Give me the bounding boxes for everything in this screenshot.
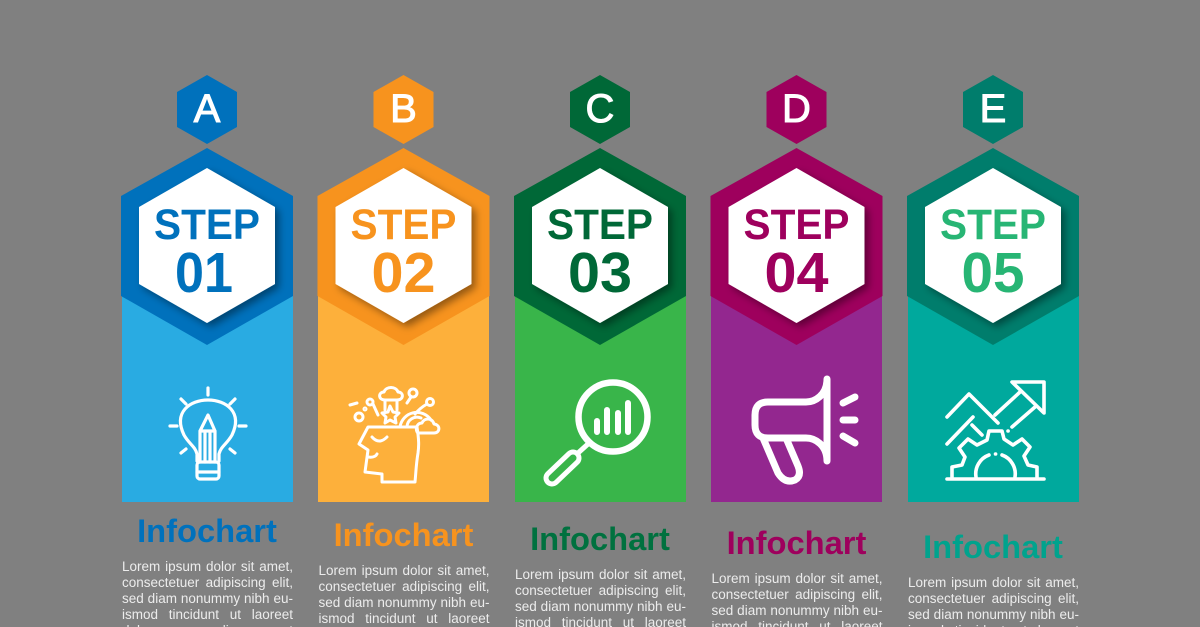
panel: step 05 colour block [908,290,1079,502]
inner hexagon with step label: 01 [175,241,233,305]
badge: letter C: C [586,87,614,131]
inner hexagon with step label: 02 [372,241,436,305]
column 5 graphic [907,75,1079,502]
text block: column 1: Lorem ipsum dolor sit amet, [122,559,293,574]
text block: column 5: Lorem ipsum dolor sit amet, [908,575,1079,590]
icon: gear with rising arrow [947,382,1044,479]
text block: column 3: consectetuer adipiscing elit, [515,583,686,598]
heading: column 3: Infochart [530,520,670,557]
inner hexagon with step label [728,168,864,323]
inner hexagon with step label: 05 [962,241,1024,305]
text block: column 5: sed diam nonummy nibh eu- [908,607,1079,622]
inner hexagon with step label: 03 [568,241,632,305]
inner hexagon with step label [336,168,472,323]
inner hexagon with step label: STEP [940,201,1046,249]
inner hexagon with step label [139,168,275,323]
text block: column 3: Lorem ipsum dolor sit amet, [515,567,686,582]
badge: letter A [177,75,237,144]
text block: column 4 [712,571,882,627]
text block: column 1: ismod tincidunt ut laoreet [122,607,293,622]
icon: megaphone [755,379,855,481]
text block: column 2 [318,563,490,626]
inner hexagon with step label [925,168,1061,323]
column 3 graphic [514,75,686,502]
column 4 graphic [710,75,882,502]
outer hexagon [318,148,490,345]
icon: magnifier with bars [552,382,648,478]
outer hexagon [121,148,293,345]
panel: step 04 colour block [711,290,882,502]
badge: letter C [570,75,630,144]
text block: column 2: consectetuer adipiscing elit, [318,579,490,594]
text block: column 4: consectetuer adipiscing elit, [712,587,882,602]
inner hexagon with step label: STEP [744,201,850,249]
inner hexagon with step label [532,168,668,323]
panel: step 02 colour block [318,290,489,502]
badge: letter D: D [782,87,811,131]
badge: letter B: B [390,87,417,131]
heading: column 2: Infochart [334,516,473,553]
inner hexagon with step label: 04 [764,241,829,305]
column 2 graphic [318,75,490,502]
badge: letter B [374,75,434,144]
text block: column 2: ismod tincidunt ut laoreet [318,611,490,626]
outer hexagon [514,148,686,345]
heading: column 1: Infochart [137,512,277,549]
text block: column 2: Lorem ipsum dolor sit amet, [318,563,490,578]
panel: step 03 colour block [515,290,686,502]
text block: column 3: sed diam nonummy nibh eu- [515,599,686,614]
inner hexagon with step label: STEP [154,201,260,249]
badge: letter D [766,75,826,144]
text block: column 1: consectetuer adipiscing elit, [122,575,293,590]
text block: column 3 [515,567,686,627]
text block: column 1: sed diam nonummy nibh eu- [122,591,293,606]
outer hexagon [907,148,1079,345]
panel: step 01 colour block [122,290,293,502]
text block: column 5: consectetuer adipiscing elit, [908,591,1079,606]
badge: letter E: E [980,87,1006,131]
text block: column 4: sed diam nonummy nibh eu- [712,603,882,618]
outer hexagon [710,148,882,345]
inner hexagon with step label: STEP [547,201,653,249]
icon: light bulb with pencil [170,388,246,479]
heading: column 4: Infochart [727,524,866,561]
text block: column 4: Lorem ipsum dolor sit amet, [712,571,882,586]
inner hexagon with step label: STEP [350,201,456,249]
text block: column 5 [908,575,1079,627]
text block: column 1 [122,559,293,627]
icon: head with ideas [350,388,439,482]
heading: column 5: Infochart [923,528,1063,565]
badge: letter E [963,75,1023,144]
badge: letter A: A [194,87,221,131]
text block: column 2: sed diam nonummy nibh eu- [318,595,490,610]
column 1 graphic [121,75,293,502]
